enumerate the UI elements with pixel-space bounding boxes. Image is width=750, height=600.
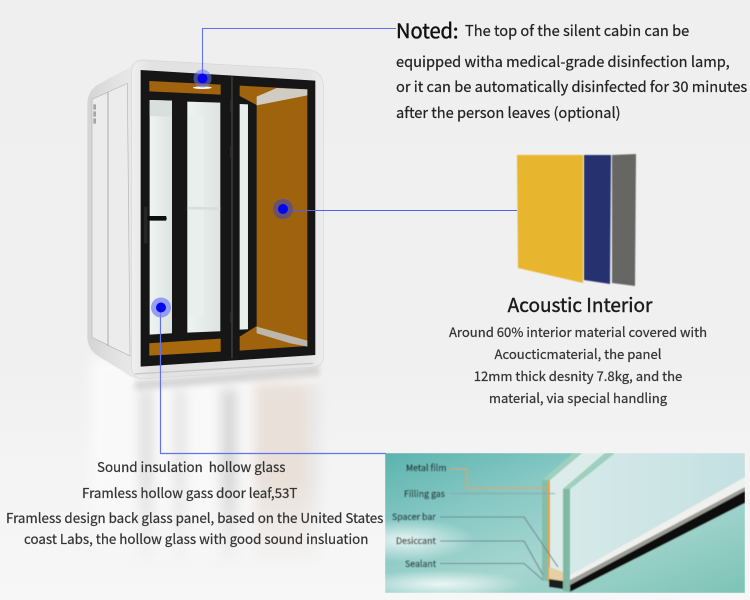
floor reflection: [96, 364, 321, 546]
note heading and text: [396, 15, 747, 123]
diagram: labels: Metal film: [406, 461, 446, 474]
orange interior: [149, 81, 221, 95]
diagram: leader lines: [440, 469, 558, 580]
glass description: Sound insulation hollow glass: [97, 457, 286, 476]
diagram: labels: Spacer bar: [392, 510, 436, 523]
note heading and text: Noted:: [396, 15, 458, 44]
glass description: Framless hollow gass door leaf,53T: [82, 483, 297, 502]
acoustic interior description: Around 60% interior material covered with: [449, 322, 707, 341]
acoustic interior description: [448, 322, 707, 407]
diagram: labels: Desiccant: [396, 534, 436, 547]
acoustic interior description: 12mm thick desnity 7.8kg, and the: [474, 366, 682, 385]
black frame: [141, 70, 315, 367]
acoustic interior description: Acoucticmaterial, the panel: [495, 344, 661, 363]
diagram: labels: Filling gas: [404, 487, 445, 500]
diagram: labels: Sealant: [405, 557, 437, 570]
note heading and text: The top of the silent cabin can be: [465, 20, 689, 41]
cabin front shell: [132, 60, 323, 379]
acoustic interior heading: Acoustic Interior: [508, 291, 652, 318]
frame divider: [231, 77, 233, 358]
glass description: coast Labs, the hollow glass with good sound insluation: [24, 529, 368, 548]
note heading and text: after the person leaves (optional): [396, 102, 621, 123]
door glass: [150, 100, 172, 335]
note heading and text: or it can be automatically disinfected for 30 minutes: [396, 76, 747, 97]
diagram: labels: [392, 461, 446, 570]
ceiling lamp: [193, 86, 212, 89]
note heading and text: equipped witha medical-grade disinfection lamp,: [396, 51, 730, 72]
acoustic interior description: material, via special handling: [489, 388, 667, 407]
glass description: Framless design back glass panel, based on the United States: [6, 508, 383, 527]
cabin side: [87, 60, 143, 380]
door handle: [145, 216, 167, 221]
glass description: [6, 457, 383, 548]
diagram: glass panes: [542, 453, 745, 592]
